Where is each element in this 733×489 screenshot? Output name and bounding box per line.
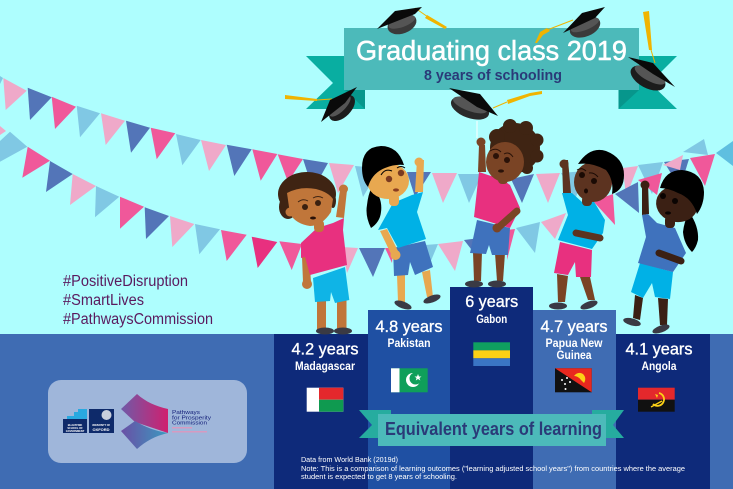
logo: University of Oxford: OXFORD [92, 427, 110, 432]
label: Madagascar [292, 340, 358, 373]
icon: graduation cap left [285, 87, 360, 126]
hashtags: #SmartLives [63, 292, 144, 309]
bunting: lower string [0, 126, 708, 277]
logo: Blavatnik School of Government [63, 409, 87, 433]
ground band [0, 334, 733, 489]
icon: graduation cap right [627, 11, 675, 96]
label: Pakistan: 4.8 years [376, 317, 442, 336]
title ribbon [306, 28, 677, 109]
flag: Angola [638, 388, 675, 412]
child: Pakistan [362, 146, 442, 311]
logo: University of Oxford: UNIVERSITY OF [92, 424, 111, 427]
child: Gabon [465, 119, 544, 288]
title text: Graduating class 2019 [356, 35, 627, 66]
podium: column Madagascar [274, 334, 368, 489]
label: Angola [626, 340, 692, 373]
source note: Note: This is a comparison of learning outcomes ("learning adjusted school years") from countries where the average [301, 464, 685, 473]
podium: column Angola [616, 334, 710, 489]
logo: Pathways for Prosperity Commission [121, 394, 212, 449]
source note: student is expected to get 8 years of schooling. [301, 472, 457, 481]
logo: Pathways for Prosperity Commission: for Prosperity [172, 416, 212, 422]
flag: Papua New Guinea [555, 368, 592, 392]
ribbon text: Equivalent years of learning [385, 419, 602, 439]
hashtags [63, 273, 213, 328]
label: Madagascar: Madagascar [295, 359, 355, 373]
source note: Data from World Bank (2019d) [301, 455, 398, 464]
podium: column Papua New Guinea [533, 310, 616, 489]
logo: Blavatnik School of Government: SCHOOL OF [67, 426, 83, 430]
label: Papua New Guinea: 4.7 years [540, 317, 608, 336]
child: Angola [622, 170, 704, 335]
icon: graduation cap top left [377, 7, 447, 38]
logo: Pathways for Prosperity Commission: Commission [172, 420, 207, 426]
ribbon: equivalent years of learning [359, 410, 624, 446]
label: Madagascar: 4.2 years [292, 340, 358, 358]
logo: Pathways for Prosperity Commission: Pathways [172, 410, 201, 416]
label: Gabon: 6 years [465, 292, 518, 311]
label: Pakistan [376, 317, 442, 350]
label: Papua New Guinea [540, 317, 608, 362]
label: Gabon: Gabon [476, 312, 507, 326]
source note [301, 455, 685, 481]
label: Angola: 4.1 years [626, 340, 692, 358]
hashtags: #PositiveDisruption [63, 273, 188, 290]
label: Pakistan: Pakistan [388, 336, 430, 350]
flag: Gabon [473, 342, 510, 366]
label: Papua New Guinea: Guinea [556, 348, 592, 362]
subtitle text: 8 years of schooling [424, 68, 562, 84]
icon: graduation cap top right [535, 7, 605, 43]
child: Madagascar [278, 172, 352, 334]
child: Papua New Guinea [549, 150, 624, 311]
logo: University of Oxford [89, 409, 114, 433]
label: Angola: Angola [642, 359, 677, 373]
podium: column Pakistan [368, 310, 450, 489]
icon: graduation cap bottom center [448, 88, 542, 124]
logo: Blavatnik School of Government: BLAVATNIK [68, 423, 82, 427]
flag: Madagascar [307, 388, 343, 412]
flag: Pakistan [391, 368, 428, 392]
label: Gabon [465, 292, 518, 326]
podium: column Gabon [450, 287, 533, 489]
logo card [48, 380, 247, 463]
logo: Blavatnik School of Government: GOVERNMENT [66, 429, 85, 433]
hashtags: #PathwaysCommission [63, 311, 213, 328]
label: Papua New Guinea: Papua New [546, 336, 603, 350]
bunting: upper string [0, 76, 733, 203]
